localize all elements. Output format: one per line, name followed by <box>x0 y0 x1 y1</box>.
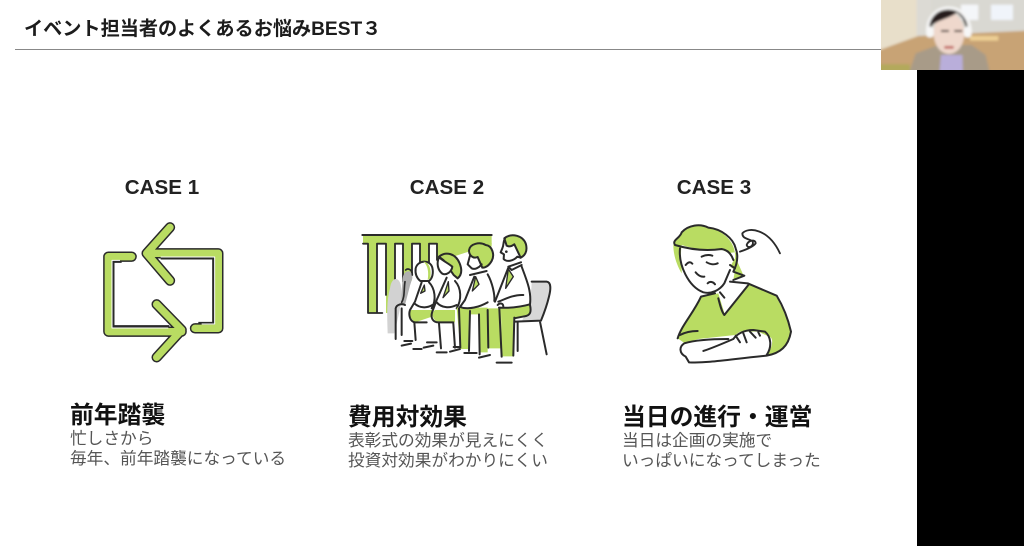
person 2 <box>424 254 462 352</box>
case 1 heading: 前年踏襲 <box>70 402 165 429</box>
case 2 text <box>348 431 548 470</box>
person 1 <box>402 262 435 349</box>
line work <box>674 225 791 362</box>
case 1 label: CASE 1 <box>125 176 199 199</box>
case 2 text: 投資対効果がわかりにくい <box>348 451 548 470</box>
case 3 text <box>622 431 821 470</box>
squiggle <box>740 230 780 253</box>
case 3 label: CASE 3 <box>677 176 751 199</box>
black side panel <box>917 70 1024 546</box>
expression <box>686 255 718 284</box>
sweater <box>678 284 791 356</box>
arm <box>681 332 772 363</box>
case 1 text: 忙しさから <box>70 429 153 448</box>
case 3 text: 当日は企画の実施で <box>622 431 772 450</box>
header rule <box>15 49 881 50</box>
person 3 <box>457 243 494 358</box>
title: イベント担当者のよくあるお悩みBEST３ <box>24 19 381 40</box>
person 4 <box>488 235 531 363</box>
face <box>681 246 733 293</box>
case 3 text: いっぱいになってしまった <box>622 451 821 470</box>
case 1 text <box>70 429 286 468</box>
white backdrop <box>388 242 535 362</box>
case 2 label: CASE 2 <box>410 176 484 199</box>
case 2 text: 表彰式の効果が見えにくく <box>348 431 548 450</box>
case 2 heading: 費用対効果 <box>348 404 467 431</box>
case 1 text: 毎年、前年踏襲になっている <box>70 449 286 468</box>
chair <box>515 282 550 354</box>
grey distant people <box>387 269 412 339</box>
stage columns <box>362 235 492 313</box>
hair <box>673 226 743 280</box>
webcam presenter <box>881 0 1024 70</box>
case 3 heading: 当日の進行・運営 <box>622 404 812 431</box>
